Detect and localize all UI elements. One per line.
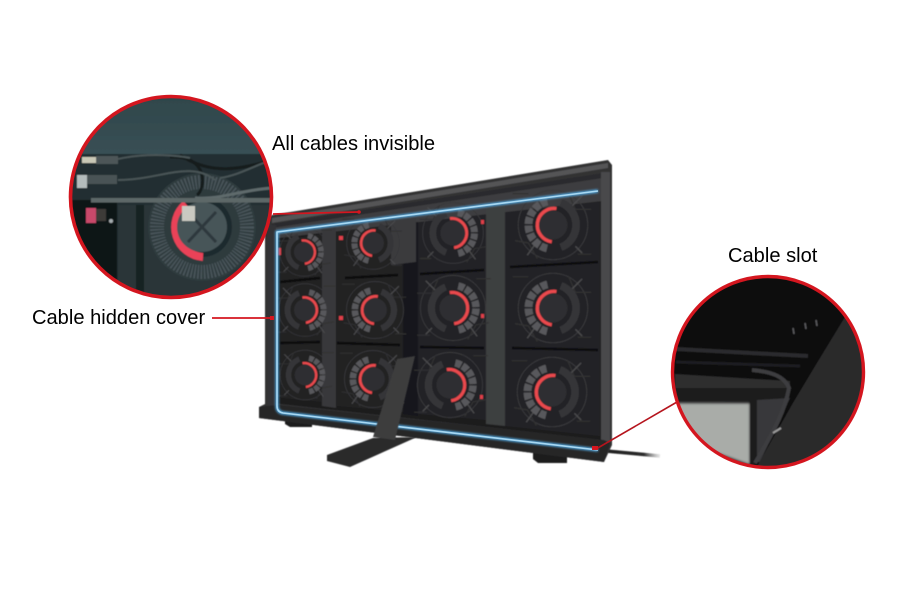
cooling fans <box>276 190 591 427</box>
callout: cable closeup circle <box>65 92 277 300</box>
row dividers <box>280 262 598 350</box>
leader line: cable slot <box>592 402 677 450</box>
stand <box>327 356 417 467</box>
rear interior <box>272 178 603 440</box>
top band <box>272 173 603 238</box>
column pillars <box>268 172 610 442</box>
support feet <box>285 418 567 463</box>
stand arm <box>373 356 415 440</box>
leader line: cable hidden cover <box>212 316 274 320</box>
small connectors <box>278 220 484 399</box>
cable exiting slot <box>606 451 660 456</box>
cable cover bracket <box>391 218 416 265</box>
cabinet modules <box>281 202 600 436</box>
callout: cable slot closeup circle <box>670 275 870 470</box>
label: cable slot: Cable slot <box>728 245 818 267</box>
LED display panel rear view <box>259 160 660 463</box>
stand foot <box>327 437 417 467</box>
leader line: all cables invisible <box>273 210 361 214</box>
blue cable route highlight <box>277 191 598 450</box>
display frame <box>259 160 612 462</box>
bottom rail <box>259 405 610 462</box>
label: cable hidden cover: Cable hidden cover <box>32 307 205 329</box>
label: all cables invisible: All cables invisible <box>272 133 435 155</box>
